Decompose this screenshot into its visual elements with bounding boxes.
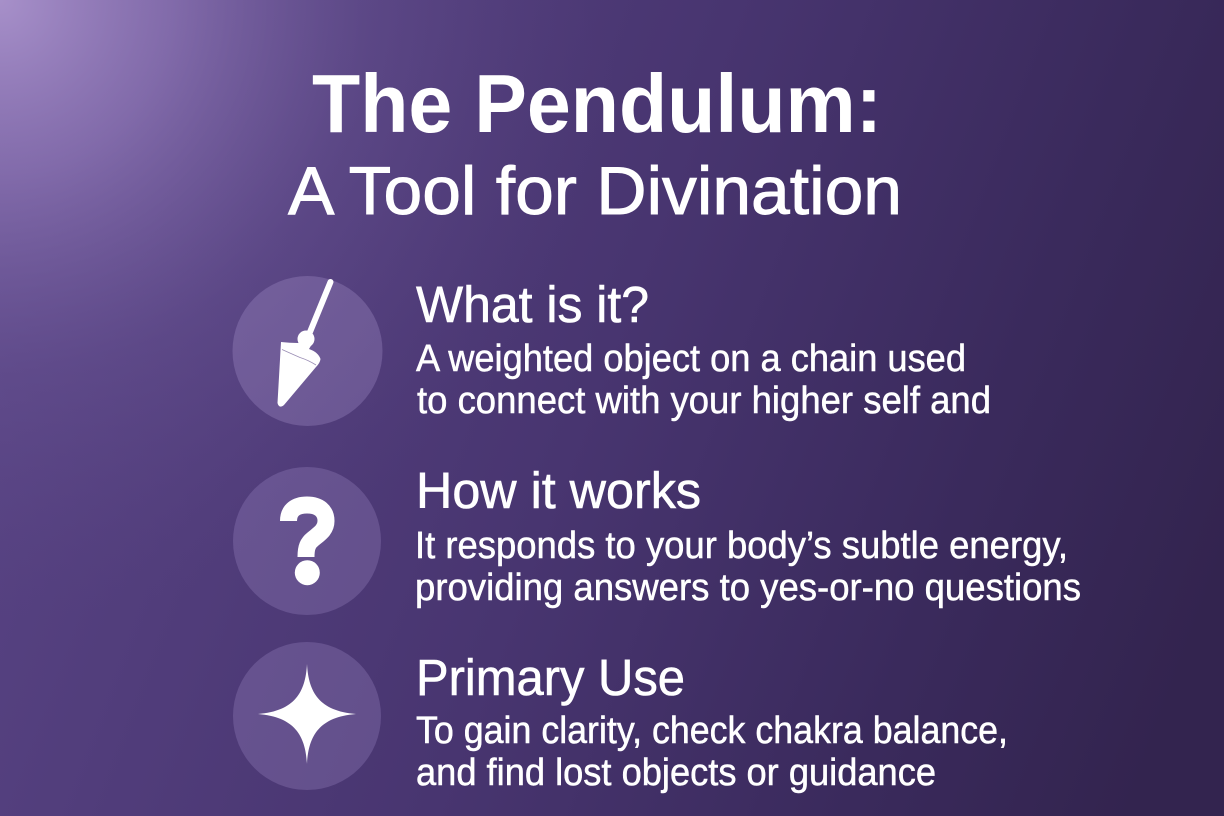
body: how it works: It responds to your body’s subtle energy, bbox=[415, 525, 1068, 567]
body: how it works: providing answers to yes-or-no questions bbox=[415, 567, 1081, 609]
body: primary use: and find lost objects or guidance bbox=[416, 752, 936, 794]
title line 1: The Pendulum: bbox=[312, 57, 882, 150]
icon: pendulum bbox=[232, 276, 382, 426]
body: primary use bbox=[416, 710, 1008, 794]
title bbox=[288, 57, 902, 229]
heading: how it works: How it works bbox=[416, 462, 701, 519]
body: how it works bbox=[415, 525, 1081, 609]
body: what is it bbox=[416, 338, 991, 422]
body: primary use: To gain clarity, check chakra balance, bbox=[416, 710, 1008, 752]
panel: how it works bbox=[233, 462, 1081, 615]
body: what is it: A weighted object on a chain used bbox=[416, 338, 966, 380]
panel: primary use bbox=[233, 642, 1008, 794]
icon: sparkle star bbox=[233, 642, 381, 790]
body: what is it: to connect with your higher self and bbox=[417, 380, 991, 422]
heading: what is it: What is it? bbox=[416, 276, 649, 333]
icon: question mark bbox=[233, 467, 381, 615]
title line 2: A Tool for Divination bbox=[288, 153, 902, 229]
heading: primary use: Primary Use bbox=[416, 649, 685, 706]
panel: what is it bbox=[232, 276, 991, 426]
